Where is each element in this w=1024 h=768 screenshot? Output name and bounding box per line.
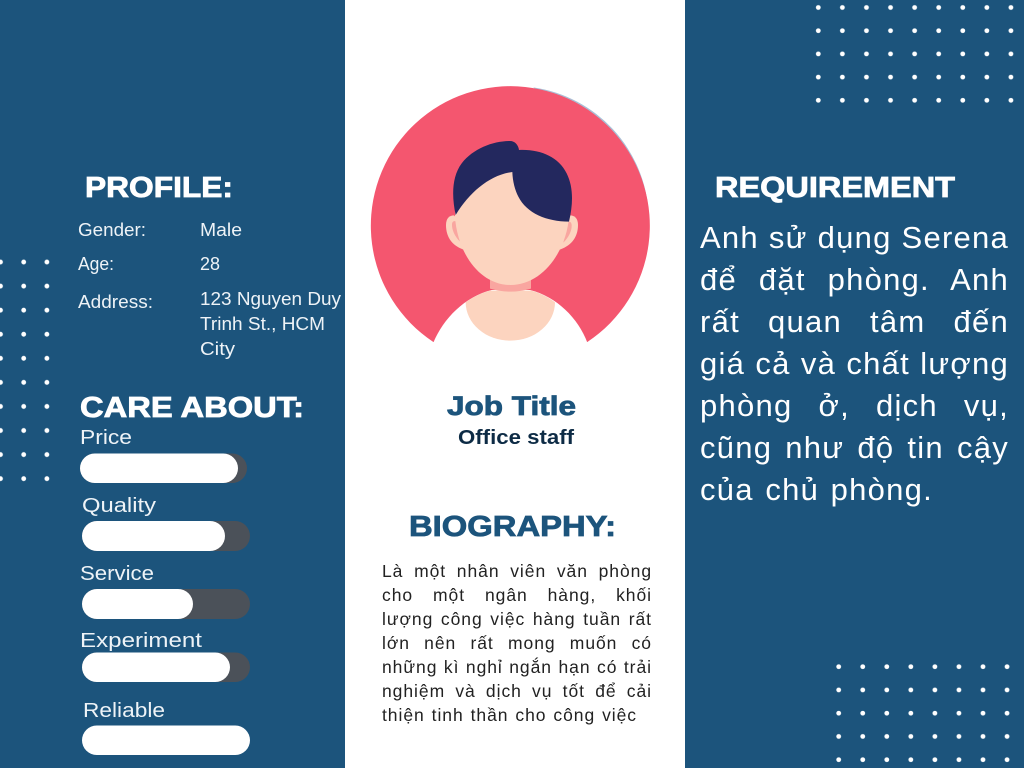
panel: avatar and biography <box>345 0 685 768</box>
bar: price <box>80 426 247 483</box>
bar: experiment: Experiment <box>80 629 202 652</box>
panel: requirement <box>685 0 1024 768</box>
bar: reliable: Reliable <box>83 699 165 722</box>
requirement text: rất quan tâm đến <box>700 304 1009 339</box>
biography text: nghiệm và dịch vụ tốt để cải <box>382 681 652 701</box>
biography text: cho một ngân hàng, khối <box>382 585 652 605</box>
biography text: những kì nghỉ ngắn hạn có trải <box>382 657 652 677</box>
heading: job title: Job Title <box>447 391 576 421</box>
address value <box>200 289 341 359</box>
bar: quality: Quality <box>82 494 157 517</box>
requirement text <box>700 220 1009 507</box>
address value: City <box>200 339 235 359</box>
requirement text: để đặt phòng. Anh <box>700 262 1009 297</box>
bar: price: Price <box>80 426 132 449</box>
requirement text: của chủ phòng. <box>700 472 933 507</box>
bar: experiment <box>80 629 250 682</box>
profile details <box>78 220 341 359</box>
icon: avatar <box>371 86 650 343</box>
age value: 28 <box>200 254 220 274</box>
requirement text: cũng như độ tin cậy <box>700 430 1009 465</box>
biography text <box>382 561 652 725</box>
heading: care about: CARE ABOUT: <box>80 392 304 424</box>
bar: reliable <box>82 699 250 755</box>
biography text: lượng công việc hàng tuần rất <box>382 609 652 629</box>
biography text: lớn nên rất mong muốn có <box>382 633 652 653</box>
requirement text: giá cả và chất lượng <box>700 346 1009 381</box>
rating bars <box>80 426 250 755</box>
bar: quality <box>82 494 250 551</box>
job title value: Office staff <box>458 427 574 449</box>
dot pattern: left <box>0 256 52 484</box>
bar: service: Service <box>80 562 154 585</box>
bar: service <box>80 562 250 619</box>
age label: Age: <box>78 254 114 274</box>
requirement text: phòng ở, dịch vụ, <box>700 388 1009 423</box>
address label: Address: <box>78 292 153 312</box>
dot pattern: top right <box>812 0 1018 106</box>
gender value: Male <box>200 220 242 240</box>
heading: biography: BIOGRAPHY: <box>409 511 616 543</box>
address value: 123 Nguyen Duy <box>200 289 341 309</box>
biography text: Là một nhân viên văn phòng <box>382 561 652 581</box>
biography text: thiện tinh thần cho công việc <box>382 705 637 725</box>
requirement text: Anh sử dụng Serena <box>700 220 1009 255</box>
panel: profile and care about <box>0 0 345 768</box>
gender label: Gender: <box>78 220 146 240</box>
address value: Trinh St., HCM <box>200 314 325 334</box>
dot pattern: bottom right <box>832 660 1024 768</box>
heading: profile: PROFILE: <box>85 172 233 204</box>
heading: requirement: REQUIREMENT <box>715 172 955 204</box>
